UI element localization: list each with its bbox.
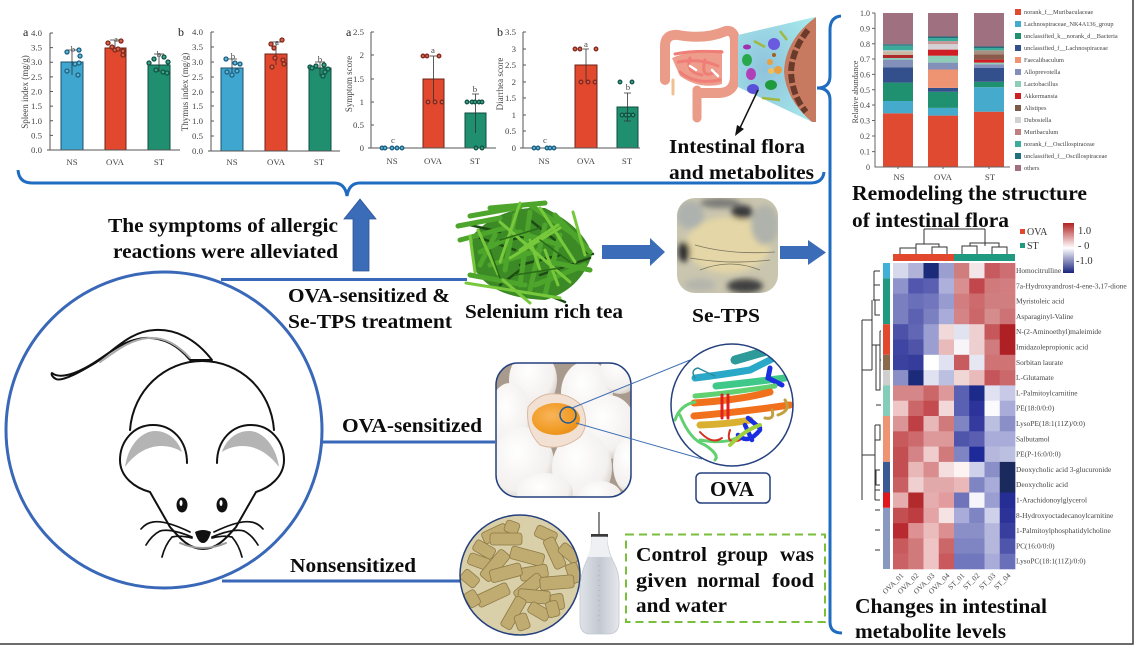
bar chart: spleen index: a — [23, 25, 29, 39]
bar chart: spleen index — [20, 25, 180, 167]
head and body — [130, 361, 274, 430]
stacked bar chart: relative abundance: ST — [985, 172, 996, 182]
metabolite labels: Imidazolepropionic acid — [1016, 342, 1088, 352]
stack: OVA — [928, 13, 958, 167]
sample labels: OVA_01 — [881, 571, 906, 596]
text: OVA-sensitized: OVA-sensitized — [342, 415, 483, 437]
legend: taxa: unclassified_f__Lachnospiraceae — [1024, 45, 1108, 52]
stacked bar chart: relative abundance: Relative abundance — [851, 60, 860, 123]
icon: selenium rich tea — [458, 203, 593, 303]
bar chart: thymus index: OVA — [267, 157, 286, 167]
stacked bar chart: relative abundance: 0.2 — [860, 132, 870, 141]
metabolite labels: 1-Arachidonoylglycerol — [1016, 496, 1087, 504]
text: Se-TPS: Se-TPS — [692, 305, 760, 327]
bar chart: spleen index: 0.5 — [31, 130, 43, 140]
top dendrogram — [900, 229, 1007, 254]
sample labels: ST_02 — [961, 571, 982, 591]
bar chart: symptom score: OVA — [424, 156, 443, 166]
stacked bar chart: relative abundance: 0.1 — [860, 148, 870, 156]
bar chart: diarrhea score: 0 — [512, 143, 517, 153]
legend: taxa: Muribaculum — [1024, 129, 1058, 136]
stack: NS — [883, 13, 913, 167]
legend: taxa — [1015, 9, 1118, 172]
heatmap cells — [893, 263, 1015, 569]
arrow: Se-TPS to results — [780, 240, 826, 265]
callout: control group — [626, 534, 825, 622]
callout: control group: normal — [697, 570, 760, 592]
sample labels: ST_03 — [977, 571, 998, 591]
brace: right results — [817, 16, 842, 633]
bar chart: diarrhea score: b — [626, 82, 631, 92]
connector lines from mouse — [221, 280, 495, 581]
colour scale — [1063, 223, 1093, 273]
bar chart: diarrhea score: 3.5 — [505, 27, 517, 37]
bar chart: diarrhea score: OVA — [577, 156, 596, 166]
bar chart: spleen index: b — [71, 44, 76, 54]
heading: remodeling the structure: Remodeling the structure — [852, 181, 1087, 205]
text: symptoms alleviated: The symptoms of allergic — [108, 215, 338, 237]
label box: OVA — [696, 473, 770, 503]
text: OVA-sensitized and Se-TPS treatment: Se-TPS treatment — [288, 311, 452, 333]
icon: colon — [665, 31, 735, 118]
bar chart: diarrhea score: 3 — [512, 44, 517, 54]
text: OVA-sensitized and Se-TPS treatment: OVA-sensitized & — [288, 285, 450, 307]
bar chart: thymus index: 1.0 — [192, 116, 204, 126]
heatmap: metabolites — [862, 223, 1127, 596]
colour scale: 1.0 — [1078, 226, 1091, 237]
legend: taxa: Alloprevotella — [1024, 69, 1061, 76]
bar chart: spleen index: 3.5 — [31, 42, 43, 52]
legend: taxa: Dubosiella — [1024, 117, 1051, 124]
metabolite labels: PE(18:0/0:0) — [1016, 404, 1055, 413]
bar chart: symptom score: a — [431, 45, 435, 55]
tail — [52, 330, 212, 380]
image: Se-TPS powder — [676, 198, 779, 293]
bar chart: thymus index: 3.5 — [192, 42, 204, 52]
callout: control group: given — [636, 570, 688, 592]
stacked bar chart: relative abundance: 0.7 — [860, 55, 870, 64]
bar chart: spleen index: ST — [154, 157, 165, 167]
bar chart: spleen index: 3.0 — [31, 57, 43, 67]
metabolite labels: LysoPC(18:1(11Z)/0:0) — [1016, 557, 1086, 566]
bar chart: thymus index: 2.0 — [192, 87, 204, 97]
stacked bar chart: relative abundance: 0.5 — [860, 86, 870, 95]
bar chart: diarrhea score — [495, 25, 640, 166]
bar chart: diarrhea score: 1.5 — [505, 93, 517, 103]
bar chart: diarrhea score: ST — [622, 156, 633, 166]
bar chart: symptom score: c — [391, 135, 395, 145]
bar chart: thymus index: b — [178, 25, 184, 39]
stacked bar chart: relative abundance: 0.8 — [860, 40, 870, 49]
icon: intestine with flora — [665, 17, 816, 136]
legend: groups: ST — [1027, 241, 1039, 252]
bar chart: symptom score: 2.5 — [353, 27, 365, 37]
metabolite labels: Homocitrulline — [1016, 266, 1062, 275]
bar chart: thymus index: 3.0 — [192, 57, 204, 67]
callout: control group: food — [772, 570, 815, 592]
legend: groups: OVA — [1027, 227, 1048, 238]
stacked bar chart: relative abundance — [851, 9, 1118, 182]
text: symptoms alleviated — [108, 215, 339, 263]
legend: taxa: norank_f__Muribaculaceae — [1024, 9, 1093, 16]
bar chart: spleen index: OVA — [106, 157, 125, 167]
zoom lines: egg to protein — [572, 360, 702, 459]
bar chart: symptom score: NS — [386, 156, 398, 166]
bar chart: spleen index: 1.5 — [31, 101, 43, 111]
bar chart: thymus index: b — [318, 54, 323, 64]
stacked bar chart: relative abundance: 1.0 — [860, 9, 870, 18]
bar chart: thymus index: 0.0 — [192, 146, 204, 156]
metabolite labels: Deoxycholic acid — [1016, 480, 1068, 489]
image: feed pellets — [459, 515, 583, 635]
text: selenium rich tea: Selenium rich tea — [465, 301, 623, 323]
bar chart: diarrhea score: 2 — [512, 77, 516, 87]
metabolite labels: Myristoleic acid — [1016, 297, 1065, 306]
bar chart: diarrhea score: b — [497, 25, 503, 39]
left ear — [120, 425, 187, 492]
metabolite labels: PC(16:0/0:0) — [1016, 541, 1055, 550]
legend: taxa: Akkermansia — [1024, 93, 1058, 100]
callout: control group: and water — [636, 595, 727, 617]
bar chart: symptom score: 0 — [360, 143, 365, 153]
metabolite labels: L-Glutamate — [1016, 373, 1054, 382]
stack: ST — [974, 13, 1004, 167]
sample labels: ST_01 — [946, 571, 967, 591]
bar chart: symptom score: b — [473, 84, 478, 94]
heading: intestinal flora and metabolites: Intestinal flora — [669, 136, 805, 158]
icon: OVA protein structure — [671, 344, 793, 466]
metabolite labels: 8-Hydroxyoctadecanoylcarnitine — [1016, 511, 1114, 520]
bar chart: thymus index: 0.5 — [192, 131, 204, 141]
metabolite labels: Deoxycholic acid 3-glucuronide — [1016, 465, 1112, 474]
bar chart: symptom score: 0.5 — [353, 120, 365, 130]
legend: taxa: Lachnospiraceae_NK4A136_group — [1024, 21, 1114, 28]
legend: groups — [1020, 227, 1048, 252]
metabolite labels: Asparaginyl-Valine — [1016, 312, 1074, 321]
bar chart: thymus index: NS — [226, 157, 238, 167]
right ear — [217, 425, 284, 492]
stacked bar chart: relative abundance: NS — [893, 172, 905, 182]
bar chart: diarrhea score: Diarrhea score — [495, 58, 505, 110]
bar chart: diarrhea score: 1 — [512, 110, 516, 120]
text: nonsensitized: Nonsensitized — [290, 555, 417, 577]
heading: changes in metabolite levels: Changes in intestinal — [855, 594, 1047, 618]
metabolite labels — [1016, 266, 1127, 566]
stacked bar chart: relative abundance: 0.9 — [860, 24, 870, 34]
bar chart: symptom score: ST — [470, 156, 481, 166]
bar chart: spleen index: 2.0 — [31, 86, 43, 96]
legend: taxa: Lactobacillus — [1024, 81, 1058, 88]
bar chart: diarrhea score: 0.5 — [505, 126, 517, 136]
bar chart: symptom score: 1 — [360, 97, 364, 107]
brace: bottom of result charts — [18, 170, 824, 196]
legend: taxa: Alistipes — [1024, 105, 1047, 112]
legend: taxa: unclassified_k__norank_d__Bacteria — [1024, 33, 1118, 40]
bar chart: symptom score: Symptom score — [344, 56, 354, 112]
eyes — [176, 498, 188, 512]
left annotation — [883, 263, 890, 569]
sample labels — [881, 571, 1013, 596]
metabolite labels: N-(2-Aminoethyl)maleimide — [1016, 327, 1102, 336]
callout: control group: Control — [636, 544, 707, 566]
heading: remodeling the structure: of intestinal flora — [852, 208, 1010, 232]
heading: changes in metabolite levels: metabolite levels — [855, 619, 1006, 643]
callout: control group: group — [717, 544, 768, 566]
arrow: flora to label — [735, 90, 758, 136]
icon: water bottle — [580, 512, 619, 634]
stacked bar chart: relative abundance: 0 — [866, 163, 870, 172]
label box: OVA: OVA — [710, 477, 755, 501]
image: eggs — [495, 362, 632, 498]
stacked bar chart: relative abundance: 0.3 — [860, 116, 870, 126]
bar chart: spleen index: NS — [66, 157, 78, 167]
text: symptoms alleviated: reactions were alleviated — [113, 241, 339, 263]
heading: intestinal flora and metabolites — [669, 136, 814, 184]
bar chart: diarrhea score: 2.5 — [505, 60, 517, 70]
bar chart: spleen index: 1.0 — [31, 116, 43, 126]
whiskers — [141, 522, 263, 557]
bar chart: thymus index — [178, 25, 340, 167]
bar chart: thymus index: b — [231, 51, 236, 61]
legend: taxa: norank_f__Oscillospiraceae — [1024, 141, 1095, 148]
metabolite labels: PE(P-16:0/0:0) — [1016, 450, 1061, 459]
bar chart: thymus index: 2.5 — [192, 72, 204, 82]
metabolite labels: 7a-Hydroxyandrost-4-ene-3,17-dione — [1016, 281, 1127, 290]
bar chart: spleen index: a — [114, 34, 118, 44]
heading: intestinal flora and metabolites: and metabolites — [669, 162, 814, 184]
legend: taxa: others — [1024, 165, 1040, 172]
bar chart: thymus index: 4.0 — [192, 27, 204, 37]
stacked bar chart: relative abundance: 0.4 — [860, 101, 870, 110]
bar chart: symptom score — [344, 25, 496, 166]
stacked bar chart: relative abundance: 0.6 — [860, 70, 870, 80]
metabolite labels: L-Palmitoylcarnitine — [1016, 388, 1078, 397]
bar chart: spleen index: b — [157, 49, 162, 59]
bar chart: spleen index: Spleen index (mg/g) — [20, 55, 30, 129]
icon: mouse — [52, 330, 284, 557]
colour scale: -1.0 — [1076, 256, 1093, 267]
bar chart: thymus index: Thymus index (mg/g) — [180, 53, 190, 131]
metabolite labels: 1-Palmitoylphosphatidylcholine — [1016, 526, 1112, 535]
metabolite labels: Sorbitan laurate — [1016, 358, 1064, 367]
arrow: tea to Se-TPS — [602, 238, 665, 266]
sample labels: OVA_04 — [927, 571, 952, 596]
bar chart: symptom score: a — [346, 25, 352, 39]
metabolite labels: Salbutamol — [1016, 434, 1050, 443]
legend: taxa: Faecalibaculum — [1024, 57, 1064, 64]
callout: control group: was — [780, 544, 814, 566]
top annotation — [893, 254, 1015, 261]
bar chart: symptom score: 2 — [360, 50, 364, 60]
bar chart: spleen index: 0.0 — [31, 145, 43, 155]
heading: remodeling the structure — [852, 181, 1087, 232]
sample labels: OVA_03 — [912, 571, 937, 596]
text: OVA-sensitized and Se-TPS treatment — [288, 285, 452, 333]
bar chart: thymus index: ST — [314, 157, 325, 167]
stacked bar chart: relative abundance: OVA — [934, 172, 953, 182]
heading: changes in metabolite levels — [855, 594, 1047, 643]
bar chart: spleen index: 2.5 — [31, 72, 43, 82]
bar chart: thymus index: 1.5 — [192, 101, 204, 111]
arrow: up to alleviated symptoms — [344, 199, 376, 271]
left dendrogram — [862, 271, 881, 550]
bar chart: spleen index: 4.0 — [31, 28, 43, 38]
bar chart: diarrhea score: NS — [538, 156, 550, 166]
mouse circle — [6, 272, 322, 588]
colour scale: - 0 — [1078, 241, 1089, 252]
bar chart: diarrhea score: c — [543, 135, 547, 145]
sample labels: ST_04 — [992, 571, 1013, 591]
icon: flora magnified — [738, 17, 816, 122]
bar chart: diarrhea score: a — [584, 39, 588, 49]
bar chart: symptom score: 1.5 — [353, 74, 365, 84]
bar chart: thymus index: a — [275, 37, 279, 47]
sample labels: OVA_02 — [896, 571, 921, 596]
metabolite labels: LysoPE(18:1(11Z)/0:0) — [1016, 419, 1086, 428]
legend: taxa: unclassified_f__Oscillospiraceae — [1024, 153, 1107, 160]
nose — [195, 530, 211, 543]
